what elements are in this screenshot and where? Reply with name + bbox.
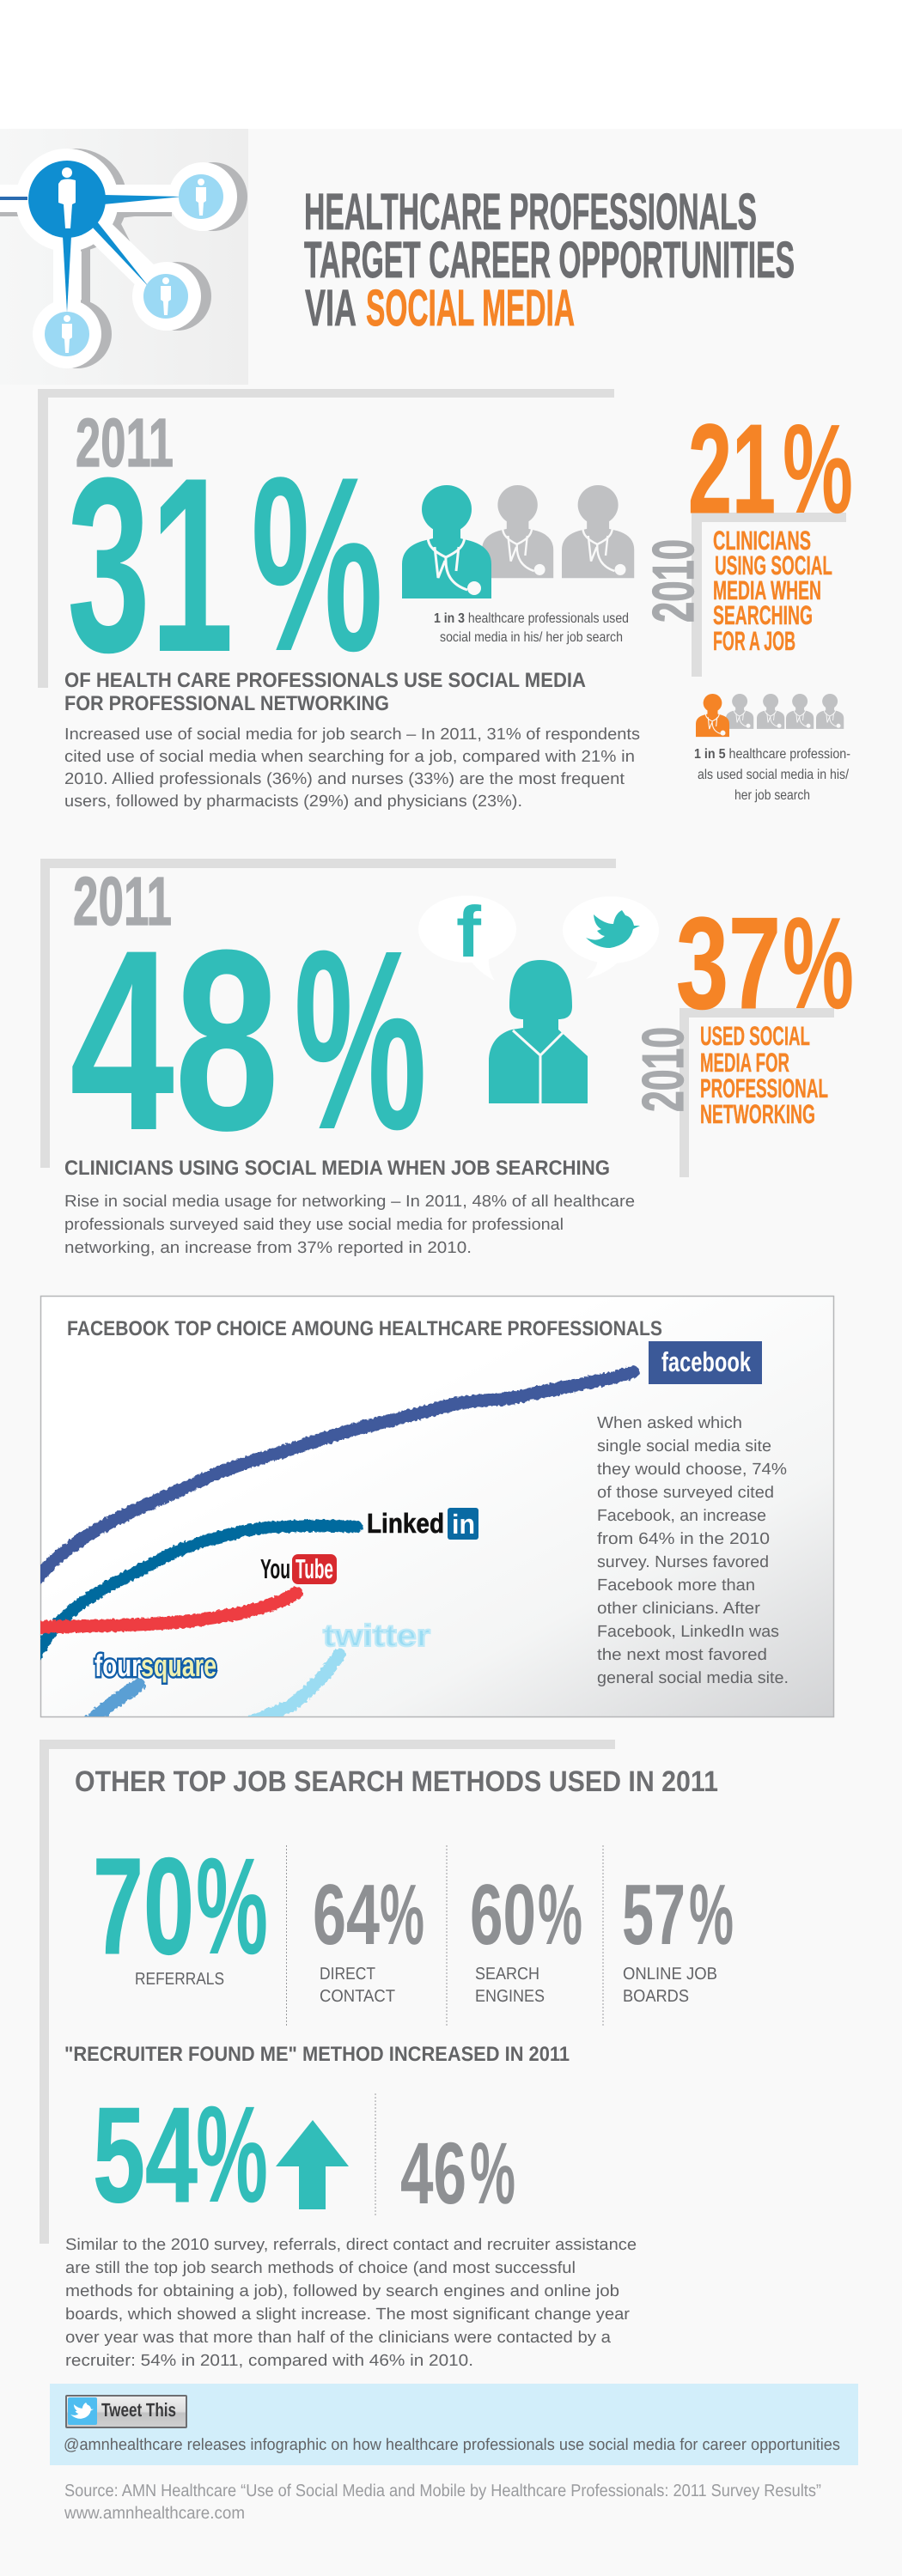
big stat 31%: % bbox=[251, 425, 383, 703]
stat 37%: 37 bbox=[676, 890, 781, 1036]
label: MEDIA WHEN bbox=[713, 575, 821, 605]
big stat 48%: % bbox=[294, 897, 427, 1183]
label: FOR A JOB bbox=[713, 626, 795, 656]
body text bbox=[65, 2236, 637, 2370]
title bbox=[304, 183, 795, 337]
icon: twitter speech bubble bbox=[563, 896, 659, 979]
body text: are still the top job search methods of choice (and most successful bbox=[65, 2259, 576, 2277]
source note: Source: AMN Healthcare “Use of Social Media and Mobile by Healthcare Professionals: 2011 Survey Results” bbox=[64, 2482, 821, 2500]
stat: search engines 60%: ENGINES bbox=[475, 1987, 545, 2006]
stat: referrals 70%: REFERRALS bbox=[135, 1970, 224, 1989]
stat: search engines 60% bbox=[470, 1867, 582, 2006]
stat: online job boards 57%: 57 bbox=[622, 1867, 686, 1963]
body text bbox=[597, 1414, 789, 1687]
logo: linkedin: in bbox=[452, 1509, 475, 1540]
heading: FACEBOOK TOP CHOICE AMOUNG HEALTHCARE PROFESSIONALS bbox=[67, 1317, 662, 1340]
heading: recruiter: "RECRUITER FOUND ME" METHOD INCREASED IN 2011 bbox=[64, 2043, 570, 2066]
body text: of those surveyed cited bbox=[597, 1484, 774, 1502]
logo: youtube: You bbox=[260, 1553, 290, 1584]
caption: 1 in 3: 1 in 3 healthcare professionals used bbox=[434, 611, 629, 626]
stat: search engines 60%: SEARCH bbox=[475, 1965, 539, 1984]
top white band bbox=[0, 0, 902, 129]
stat: online job boards 57%: ONLINE JOB bbox=[623, 1965, 717, 1984]
title: VIA bbox=[305, 279, 357, 337]
logo: facebook bbox=[649, 1341, 762, 1384]
button: tweet this: Tweet This bbox=[101, 2399, 176, 2421]
body text: methods for obtaining a job), followed by search engines and online job bbox=[65, 2282, 619, 2300]
panel: 2011 48 percent bbox=[40, 859, 659, 1257]
panel: 2011 31 percent: social media in his/ her job search bbox=[440, 630, 623, 645]
panel: 2011 31 percent bbox=[38, 389, 640, 811]
stat: search engines 60%: % bbox=[538, 1867, 582, 1963]
heading: OF HEALTH CARE PROFESSIONALS USE SOCIAL MEDIA bbox=[64, 669, 586, 692]
body text: they would choose, 74% bbox=[597, 1461, 787, 1479]
stat: direct contact 64%: 64 bbox=[313, 1867, 380, 1963]
heading: CLINICIANS USING SOCIAL MEDIA WHEN JOB SEARCHING bbox=[64, 1157, 610, 1180]
heading: OTHER TOP JOB SEARCH METHODS USED IN 2011 bbox=[75, 1765, 718, 1798]
stat 37%: % bbox=[783, 890, 854, 1036]
body text: recruiter: 54% in 2011, compared with 46% in 2010. bbox=[65, 2352, 473, 2370]
body text: Facebook, an increase bbox=[597, 1507, 766, 1525]
logo: youtube: Tube bbox=[296, 1553, 333, 1584]
caption: 1 in 5: 1 in 5 healthcare profession- bbox=[694, 747, 850, 762]
stat: search engines 60%: 60 bbox=[470, 1867, 536, 1963]
year 2010 vertical: 2010 bbox=[641, 539, 706, 623]
tweet text: @amnhealthcare releases infographic on how healthcare professionals use social media for career opportunities bbox=[64, 2436, 840, 2454]
big stat 31%: 31 bbox=[67, 426, 234, 704]
body text: Increased use of social media for job search – In 2011, 31% of respondents bbox=[64, 726, 640, 744]
caption: 1 in 5: her job search bbox=[734, 788, 810, 803]
body text bbox=[64, 1193, 635, 1257]
label: CLINICIANS bbox=[713, 526, 811, 556]
label: NETWORKING bbox=[700, 1099, 815, 1129]
icon: facebook speech bubble bbox=[418, 891, 516, 981]
stat: online job boards 57% bbox=[622, 1867, 734, 2006]
stat: direct contact 64%: CONTACT bbox=[320, 1987, 395, 2006]
body text: general social media site. bbox=[597, 1669, 789, 1687]
body text: survey. Nurses favored bbox=[597, 1553, 769, 1571]
stat: online job boards 57%: BOARDS bbox=[623, 1987, 689, 2006]
logo: linkedin: Linked bbox=[367, 1508, 444, 1539]
stat: direct contact 64% bbox=[313, 1867, 424, 2006]
logo: foursquare bbox=[94, 1648, 216, 1683]
chart: social network trend strokes bbox=[34, 1372, 633, 1722]
stat: 54%: % bbox=[196, 2077, 268, 2231]
body text: Facebook more than bbox=[597, 1577, 755, 1595]
body text: When asked which bbox=[597, 1414, 742, 1432]
stat: direct contact 64%: % bbox=[380, 1867, 424, 1963]
body text: Rise in social media usage for networking – In 2011, 48% of all healthcare bbox=[64, 1193, 635, 1211]
stat: 46%: 46 bbox=[400, 2124, 466, 2222]
panel: 2010 21 percent bbox=[641, 398, 853, 803]
stat: referrals 70%: 70 bbox=[93, 1829, 194, 1983]
body text: users, followed by pharmacists (29%) and physicians (23%). bbox=[64, 793, 522, 811]
logo: youtube bbox=[260, 1553, 337, 1584]
body text: 2010. Allied professionals (36%) and nurses (33%) are the most frequent bbox=[64, 770, 625, 788]
body text bbox=[64, 726, 640, 811]
icon: three doctors bbox=[402, 485, 634, 598]
caption: 1 in 5 bbox=[694, 747, 850, 803]
icon: five doctors bbox=[696, 694, 844, 737]
stat: online job boards 57%: % bbox=[689, 1867, 734, 1963]
stat: referrals 70%: % bbox=[196, 1829, 268, 1983]
person collar bbox=[513, 1030, 565, 1104]
body text: networking, an increase from 37% reported in 2010. bbox=[64, 1239, 472, 1257]
body text: Similar to the 2010 survey, referrals, direct contact and recruiter assistance bbox=[65, 2236, 637, 2254]
body text: professionals surveyed said they use social media for professional bbox=[64, 1216, 564, 1234]
logo: foursquare: four bbox=[94, 1648, 141, 1683]
header panel: network icon bbox=[0, 129, 248, 385]
label: MEDIA FOR bbox=[700, 1048, 789, 1078]
year 2011: 2011 bbox=[76, 404, 174, 481]
source note bbox=[64, 2482, 821, 2523]
label: SEARCHING bbox=[713, 600, 813, 630]
panel: other job search methods bbox=[40, 1740, 734, 2370]
stat 21%: % bbox=[783, 398, 853, 540]
icon: facebook speech bubble: f bbox=[456, 891, 482, 972]
heading bbox=[64, 669, 586, 715]
label: USING SOCIAL bbox=[715, 550, 832, 580]
year 2011: 2011 bbox=[73, 863, 172, 939]
panel: tweet box bbox=[50, 2384, 858, 2465]
label bbox=[700, 1021, 828, 1129]
label bbox=[713, 526, 832, 656]
logo: facebook: facebook bbox=[661, 1346, 751, 1377]
caption: 1 in 5: als used social media in his/ bbox=[698, 768, 849, 782]
title: SOCIAL MEDIA bbox=[366, 279, 575, 337]
panel: 2010 37 percent bbox=[631, 890, 854, 1177]
panel: facebook top choice bbox=[34, 1297, 833, 1722]
logo: twitter: twitter bbox=[323, 1618, 430, 1653]
body text: over year was that more than half of the clinicians were contacted by a bbox=[65, 2329, 611, 2347]
stat: 54%: 54 bbox=[93, 2080, 198, 2231]
stat 21%: 21 bbox=[688, 398, 776, 540]
year 2010 vertical: 2010 bbox=[631, 1027, 696, 1112]
body text: from 64% in the 2010 bbox=[597, 1530, 770, 1548]
big stat 48%: 48 bbox=[70, 896, 279, 1184]
stat: 46%: % bbox=[470, 2124, 515, 2222]
logo: foursquare: square bbox=[141, 1648, 216, 1683]
icon: person bbox=[489, 960, 588, 1103]
arrow: up bbox=[276, 2120, 349, 2209]
body text: cited use of social media when searching for a job, compared with 21% in bbox=[64, 748, 635, 766]
body text: boards, which showed a slight increase. The most significant change year bbox=[65, 2306, 631, 2324]
body text: other clinicians. After bbox=[597, 1600, 761, 1618]
body text: Facebook, LinkedIn was bbox=[597, 1623, 779, 1641]
button: tweet this bbox=[66, 2396, 186, 2427]
source note: www.amnhealthcare.com bbox=[64, 2504, 245, 2523]
stat: direct contact 64%: DIRECT bbox=[320, 1965, 375, 1984]
body text: the next most favored bbox=[597, 1646, 767, 1664]
body text: single social media site bbox=[597, 1437, 771, 1455]
label: USED SOCIAL bbox=[700, 1021, 810, 1051]
heading: FOR PROFESSIONAL NETWORKING bbox=[64, 692, 389, 715]
